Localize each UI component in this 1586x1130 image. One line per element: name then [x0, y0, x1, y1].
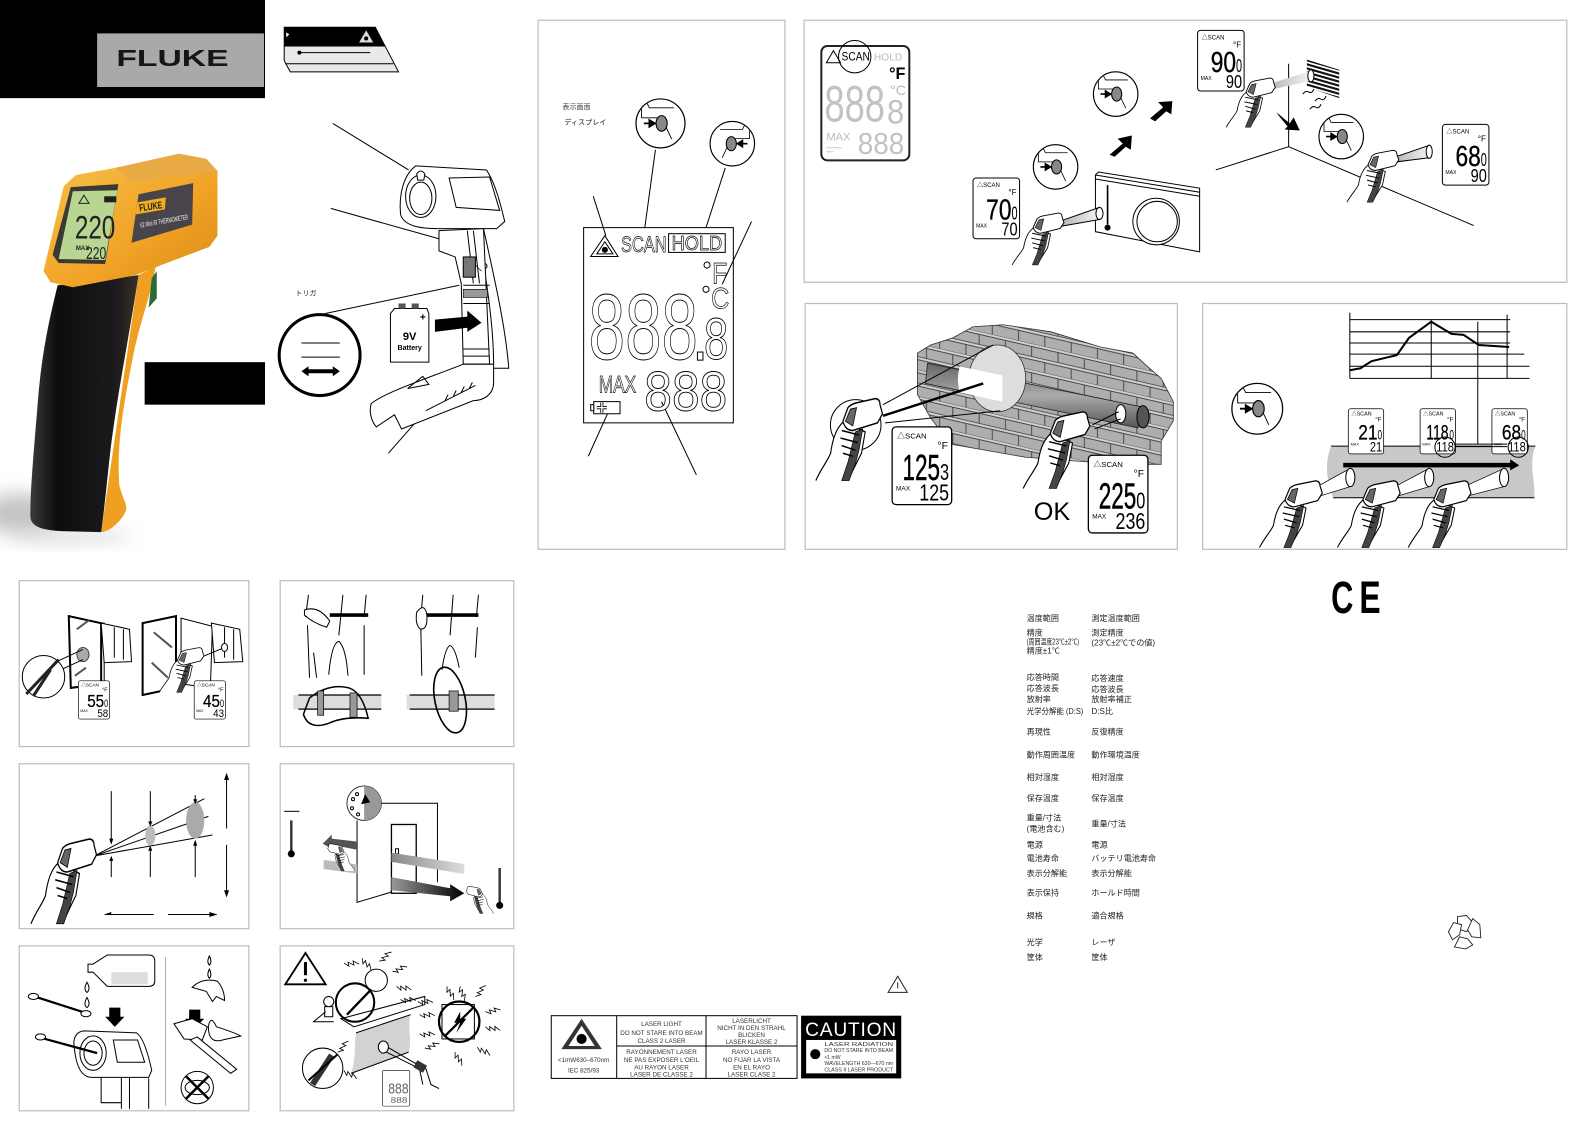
hand with thermometer	[31, 839, 96, 924]
specification table: (電池含む)	[1027, 824, 1065, 834]
sun and heater prohibited	[314, 950, 425, 1027]
right figure	[407, 595, 495, 736]
specification table: 応答波長	[1027, 683, 1059, 693]
LCD all segments: F	[712, 257, 727, 290]
label panel: 62 Mini IR THERMOMETER	[140, 213, 189, 230]
arrow: insert battery	[435, 311, 481, 332]
readout 125.3: 3	[940, 459, 949, 485]
trigger label: トリガ	[295, 288, 317, 297]
caution label: CAUTION	[805, 1020, 896, 1041]
readout 225.0: MAX	[1092, 514, 1107, 521]
laser triangle	[561, 1019, 602, 1049]
laser warning label: LASER DE CLASSE 2	[630, 1071, 693, 1078]
specification table: 再現性	[1027, 726, 1051, 736]
specification table: 電池寿命	[1027, 853, 1059, 863]
laser warning label	[551, 1016, 797, 1078]
LCD with SCAN highlighted: 888	[858, 128, 904, 161]
direction arrow	[1343, 459, 1519, 470]
readout 125.3	[892, 427, 952, 506]
left figure	[293, 595, 381, 725]
LCD with SCAN highlighted: 8	[887, 93, 904, 131]
arrow down	[105, 1008, 124, 1027]
swab on lens	[35, 1034, 97, 1053]
black title block	[145, 362, 265, 405]
specification table: 放射率補正	[1091, 694, 1132, 704]
specification table: 電源	[1091, 841, 1108, 850]
LCD all segments: SCAN	[621, 232, 667, 257]
readout 70.0: 70	[1001, 220, 1018, 240]
icon: recycle	[1448, 916, 1481, 949]
readout 55.0: MAX	[80, 709, 89, 713]
readout 45.0	[194, 681, 225, 720]
electrical hazard prohibited	[418, 984, 501, 1067]
readout 68.0	[1442, 124, 1489, 186]
panel: distance to spot ratio	[19, 764, 249, 929]
label panel	[131, 183, 193, 243]
readout 68	[1492, 409, 1527, 455]
readout 90.0	[1198, 30, 1244, 92]
room lines	[357, 803, 437, 902]
panel: environmental warnings	[280, 946, 514, 1111]
readout 118: 118	[1426, 421, 1449, 445]
specification table: 保存温度	[1091, 793, 1124, 803]
icon: 9V battery: Battery	[397, 344, 422, 352]
photo: Fluke 62 thermometer	[0, 154, 217, 541]
readout 118: 118	[1436, 440, 1454, 455]
trigger circles	[636, 99, 685, 148]
CE mark	[1331, 572, 1381, 623]
readout 21: △SCAN	[1351, 410, 1372, 417]
diagram: thermometer interior with battery	[279, 123, 509, 453]
readout 21: 21	[1370, 440, 1382, 455]
specification table: 相対湿度	[1027, 772, 1059, 782]
readout 70.0	[973, 178, 1020, 240]
readout 90.0: MAX	[1201, 76, 1212, 82]
readout 225.0: °F	[1134, 469, 1144, 480]
readout 70.0: 70	[986, 195, 1011, 227]
panel: brick wall and pipe	[805, 303, 1177, 549]
specification table: D:S比	[1091, 706, 1113, 716]
panel: cleaning	[19, 946, 249, 1111]
specification table: 応答速度	[1091, 673, 1124, 683]
laser warning label: RAYONNEMENT LASER	[626, 1049, 697, 1056]
battery door	[370, 364, 494, 429]
air flows	[323, 835, 464, 901]
LCD with SCAN highlighted: 888	[824, 75, 885, 132]
laser warning label: NO FIJAR LA VISTA	[723, 1057, 781, 1064]
hand units	[328, 844, 355, 871]
readout 118: 0	[1449, 428, 1454, 443]
specification table: 保存温度	[1027, 793, 1059, 803]
specification table: 重量/寸法	[1027, 812, 1061, 822]
specification table: 放射率	[1027, 694, 1051, 704]
LCD all segments	[584, 228, 733, 423]
readout 21: 0	[1378, 428, 1382, 443]
specification table: 光学	[1027, 937, 1043, 947]
target spot	[969, 345, 1026, 412]
caution label	[801, 1016, 901, 1078]
specification table: 測定精度	[1091, 627, 1124, 637]
label panel: FLUKE	[138, 200, 163, 214]
specification table: 測定温度範囲	[1091, 613, 1140, 623]
readout 118	[1420, 409, 1455, 455]
laser warning label: NICHT IN DEN STRAHL	[717, 1025, 786, 1032]
specification table	[1027, 613, 1156, 962]
readout 118: △SCAN	[1423, 410, 1444, 417]
readout 45.0: °F	[218, 688, 223, 694]
specification table: ホールド時間	[1091, 888, 1140, 897]
LCD with SCAN highlighted: HOLD	[874, 53, 902, 64]
specification table: 筐体	[1027, 952, 1043, 962]
readout 70.0: 0	[1011, 204, 1018, 224]
right gun	[1023, 412, 1090, 488]
LCD all segments: 888	[644, 361, 727, 423]
laser warning label: DO NOT STARE INTO BEAM	[620, 1030, 703, 1037]
LCD all segments: HOLD	[672, 233, 722, 255]
no solvent	[181, 1071, 213, 1104]
readout 55.0: °F	[102, 688, 108, 694]
panel: doors and air flow	[280, 764, 514, 929]
readout 90.0: 90	[1226, 72, 1242, 92]
readout 68: △SCAN	[1495, 410, 1515, 417]
specification table: 筐体	[1091, 952, 1108, 962]
laser warning label: LASER KLASSE 2	[726, 1039, 778, 1046]
warning triangle	[285, 953, 326, 984]
warning flag label	[284, 27, 399, 72]
specification table: 動作環境温度	[1091, 750, 1140, 760]
laser warning label: RAYO LASER	[732, 1049, 772, 1056]
LCD screen: 220	[86, 243, 106, 263]
readout 68: °F	[1519, 417, 1525, 423]
specification table: 光学分解能 (D:S)	[1027, 706, 1084, 716]
readout 45.0: △SCAN	[197, 682, 215, 688]
caution label: DO NOT STARE INTO BEAM	[824, 1048, 893, 1054]
wet cloth	[192, 956, 225, 1002]
duct band	[1327, 446, 1535, 498]
readout: 888	[391, 1095, 408, 1105]
specification table: 反復精度	[1091, 726, 1124, 736]
caution label: WAVELENGTH 630—670 nm	[824, 1061, 893, 1067]
logo: FLUKE: FLUKE	[116, 45, 229, 71]
readout 68.0: 90	[1471, 166, 1487, 186]
panel: display	[538, 20, 785, 549]
readout 21: MAX	[1351, 443, 1359, 447]
specification table: 精度	[1027, 627, 1043, 637]
laser warning label: LASER LIGHT	[641, 1021, 682, 1028]
CE mark: C	[1331, 572, 1353, 623]
swab	[28, 993, 91, 1017]
laser warning label: AU RAYON LASER	[634, 1064, 689, 1071]
readout 70.0: °F	[1008, 188, 1017, 197]
specification table: バッテリ電池寿命	[1091, 853, 1156, 863]
readout 55.0: 58	[97, 707, 109, 720]
guns along duct	[1259, 468, 1509, 548]
readout 68.0: MAX	[1445, 170, 1457, 176]
step: room corner	[1347, 145, 1432, 202]
steam area	[351, 1015, 411, 1073]
MAX highlight circles	[1435, 437, 1528, 457]
readout 68: 68	[1502, 421, 1521, 445]
specification table: 温度範囲	[1027, 613, 1059, 623]
step: thermostat	[1012, 172, 1200, 265]
dial	[347, 786, 381, 820]
readout 225.0: △SCAN	[1094, 460, 1123, 469]
display labels: 表示画面	[562, 102, 591, 111]
specification table: (23℃±2℃での値)	[1091, 637, 1155, 647]
readout 21: 21	[1358, 421, 1378, 445]
readout 225.0	[1088, 455, 1148, 534]
readout 21	[1348, 409, 1384, 455]
readout 125.3: 125	[919, 480, 949, 506]
drops	[85, 982, 89, 1008]
specification table: 応答時間	[1027, 672, 1059, 682]
readout 45.0: MAX	[196, 709, 204, 713]
LCD screen	[59, 190, 117, 263]
readout 125.3: 125	[902, 447, 940, 488]
bottle	[88, 955, 155, 986]
laser warning label: EN EL RAYO	[733, 1064, 770, 1071]
door	[391, 824, 416, 893]
readout 68.0: 0	[1481, 150, 1487, 170]
readout 125.3: △SCAN	[897, 432, 927, 441]
thermometers	[284, 811, 503, 909]
gun outline	[400, 166, 509, 368]
specification table: 表示分解能	[1091, 868, 1132, 878]
probe prohibited	[302, 1039, 358, 1089]
readout 55.0: △SCAN	[81, 682, 99, 688]
readout 55.0	[78, 681, 110, 720]
callout lines	[325, 123, 459, 453]
readout 125.3: MAX	[896, 485, 911, 492]
panel: scan sequence	[804, 20, 1567, 282]
specification table: 表示分解能	[1027, 868, 1067, 878]
icon: 9V battery: 9V	[403, 331, 417, 343]
specification table: 応答波長	[1091, 684, 1124, 694]
readout: 888	[388, 1081, 409, 1098]
step: vent in room	[1216, 60, 1474, 226]
specification table: レーザ	[1091, 938, 1115, 947]
OK label: OK	[1034, 498, 1070, 526]
readout 68: MAX	[1494, 443, 1503, 447]
measurement arrows	[105, 774, 227, 915]
left gun	[816, 399, 882, 481]
laser warning label: LASER CLASE 2	[727, 1071, 776, 1078]
arrows	[1110, 136, 1132, 157]
panel: measuring through glass	[19, 581, 249, 747]
steam gun	[378, 1041, 439, 1089]
icon: 9V battery	[390, 303, 429, 362]
arrow down	[185, 1010, 204, 1028]
LCD with SCAN highlighted: MAX	[826, 132, 851, 144]
CE mark: E	[1359, 572, 1381, 623]
readout 225.0: 0	[1136, 487, 1145, 513]
LCD with SCAN highlighted: °C	[890, 83, 906, 99]
gun front	[74, 1031, 152, 1109]
right window	[143, 616, 243, 695]
specification table: 適合規格	[1091, 911, 1124, 921]
circle detail	[279, 315, 360, 396]
LCD screen: MAX	[76, 246, 89, 252]
readout 68: 118	[1508, 440, 1526, 455]
left window	[22, 616, 131, 698]
spots	[145, 802, 204, 846]
readout 90.0: △SCAN	[1202, 33, 1224, 41]
laser warning label: NE PAS EXPOSER L'OEIL	[624, 1057, 700, 1064]
LCD with SCAN highlighted: °F	[889, 65, 906, 83]
caution label: <1 mW	[824, 1055, 841, 1061]
LCD with SCAN highlighted	[821, 40, 909, 161]
caution label: LASER RADIATION	[824, 1042, 894, 1048]
icon: 9V battery: +	[420, 313, 426, 324]
LCD screen: 220	[75, 210, 115, 246]
readout 118: MAX	[1422, 443, 1431, 447]
specification table: 電源	[1027, 841, 1043, 850]
readout 90.0: °F	[1233, 41, 1241, 50]
LCD all segments: 888	[589, 275, 698, 379]
readout 55.0: 55	[87, 690, 104, 711]
readout 70.0: △SCAN	[977, 181, 1000, 189]
LCD all segments: MAX	[599, 372, 636, 399]
readout 45.0: 43	[213, 707, 224, 720]
readout 225.0: 225	[1099, 475, 1136, 516]
readout 45.0: 0	[220, 696, 224, 710]
battery symbol	[591, 402, 620, 414]
laser warning label: CLASS 2 LASER	[637, 1038, 686, 1045]
readout 45.0: 45	[203, 690, 220, 711]
readout 21: °F	[1375, 417, 1382, 423]
panel: display: ディスプレイ	[564, 117, 606, 126]
laser warning label: LASERLICHT	[732, 1018, 771, 1025]
beam lines	[95, 799, 212, 856]
pipe	[926, 363, 1146, 428]
LCD all segments: 8	[704, 307, 728, 372]
readout 90.0: 0	[1236, 56, 1242, 76]
panel: belt holster	[280, 581, 514, 747]
trigger icons	[1033, 145, 1078, 189]
beams	[883, 345, 1000, 423]
readout 70.0: MAX	[976, 224, 988, 230]
readout 68.0: △SCAN	[1446, 128, 1469, 136]
header: black brand band	[0, 0, 265, 98]
logo plate	[97, 33, 264, 87]
gun wiping	[174, 1019, 241, 1073]
LCD with SCAN highlighted: SCAN	[842, 50, 870, 64]
readout 118: °F	[1447, 417, 1454, 423]
specification table: (周囲温度23℃±2℃)	[1027, 636, 1079, 646]
trigger icon	[1232, 383, 1283, 434]
laser warning label: <1mW630–670nm	[558, 1057, 609, 1064]
specification table: 精度±1℃	[1027, 646, 1060, 656]
readout 68.0: 68	[1456, 141, 1481, 173]
caution label: CLASS II LASER PRODUCT	[824, 1067, 893, 1073]
readout 125.3: °F	[937, 441, 948, 452]
readout 55.0: 0	[104, 696, 108, 710]
callouts	[588, 150, 752, 475]
readout 68: 0	[1521, 428, 1526, 443]
readout 90.0: 90	[1211, 47, 1236, 79]
readout	[382, 1070, 410, 1106]
icon: caution triangle	[888, 976, 907, 992]
line chart	[1350, 313, 1529, 444]
readout 225.0: 236	[1116, 508, 1145, 534]
readout 68.0: °F	[1478, 135, 1486, 144]
brick wall	[917, 325, 1173, 464]
panel: pipe scan with MAX chart	[1203, 303, 1567, 549]
LCD all segments: C	[711, 283, 729, 316]
specification table: 重量/寸法	[1091, 819, 1126, 829]
specification table: 規格	[1027, 911, 1043, 921]
laser warning label: BLICKEN	[738, 1032, 765, 1039]
specification table: 表示保持	[1027, 887, 1059, 897]
specification table: 動作周囲温度	[1027, 750, 1075, 760]
specification table: 相対湿度	[1091, 772, 1124, 782]
laser warning label: IEC 825/93	[568, 1067, 600, 1074]
